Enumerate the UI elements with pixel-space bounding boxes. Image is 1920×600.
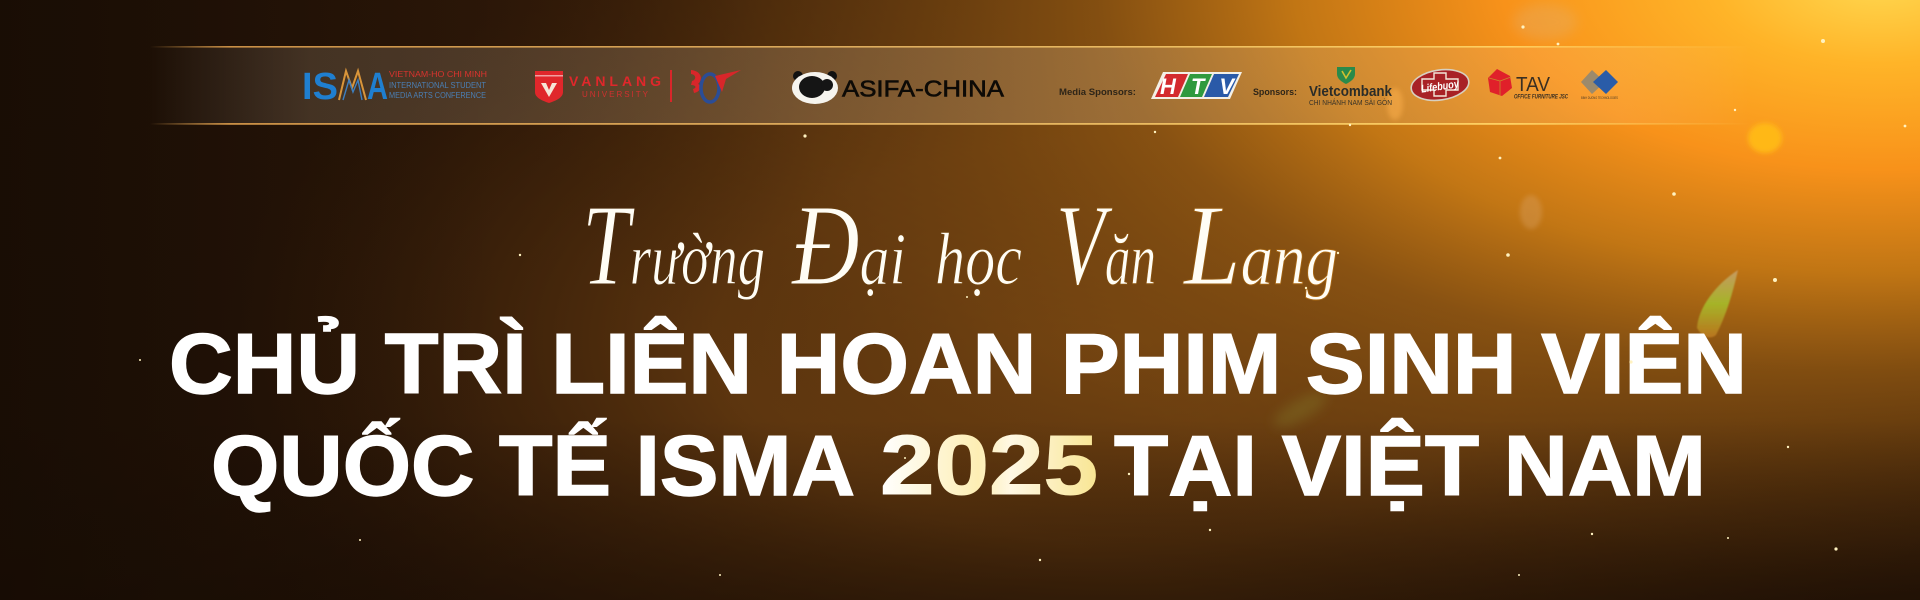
logo: TAV Office Furniture [1488,69,1569,100]
title line 2 [211,418,1706,514]
logo: ASIFA-CHINA: ASIFA-CHINA [842,76,1005,102]
subtitle: script heading: Văn [1056,182,1156,310]
logo: ASIFA-CHINA [792,71,1005,104]
subtitle: script heading: Trường [582,182,765,310]
logo: Vietcombank: CHI NHÁNH NAM SÀI GÒN [1309,98,1392,107]
logo: ISMA: VIETNAM-HO CHI MINH [389,69,487,79]
logo: ISMA: IS [302,66,338,108]
subtitle: script heading: Lang [1182,182,1338,310]
logo: diamond sponsor [1581,70,1618,100]
logo: Vietcombank: Vietcombank [1309,83,1393,100]
title line 2: QUỐC TẾ ISMA [211,418,855,514]
year 2025 in gold gradient: 2025 [880,418,1098,512]
logo: ISMA [302,66,487,108]
subtitle: script heading [582,182,1338,310]
icon: green leaf light streak [1697,270,1738,337]
logo: TAV Office Furniture: OFFICE FURNITURE JSC [1514,94,1569,100]
subtitle: script heading: học [935,219,1022,301]
lens flare and light blobs [1269,4,1782,434]
logo: TAV Office Furniture: TAV [1516,74,1551,96]
logo: ISMA: A [367,66,388,108]
logo: diamond sponsor: BINH DUONG TECHNOLOGIES [1581,96,1618,100]
logo: Lifebuoy: Lifebuoy [1420,78,1460,96]
logo: Van Lang University: VANLANG [569,73,661,89]
text: Media Sponsors: Media Sponsors: [1059,87,1136,98]
logo: ISMA: MEDIA ARTS CONFERENCE [389,91,486,100]
title line 2: TẠI VIỆT NAM [1114,418,1706,514]
logo: Lifebuoy [1409,66,1471,104]
logo: HTV: HTV [1160,74,1236,99]
text: Sponsors: Sponsors: [1253,87,1297,98]
logo: Van Lang University [535,70,741,103]
subtitle: script heading: Đại [790,182,906,310]
title line 1: CHỦ TRÌ LIÊN HOAN PHIM SINH VIÊN [169,316,1747,412]
logo: ISMA: INTERNATIONAL STUDENT [389,81,486,90]
logo band [150,46,1750,125]
logo: Vietcombank [1309,67,1393,107]
logo: Van Lang University: UNIVERSITY [582,90,649,99]
